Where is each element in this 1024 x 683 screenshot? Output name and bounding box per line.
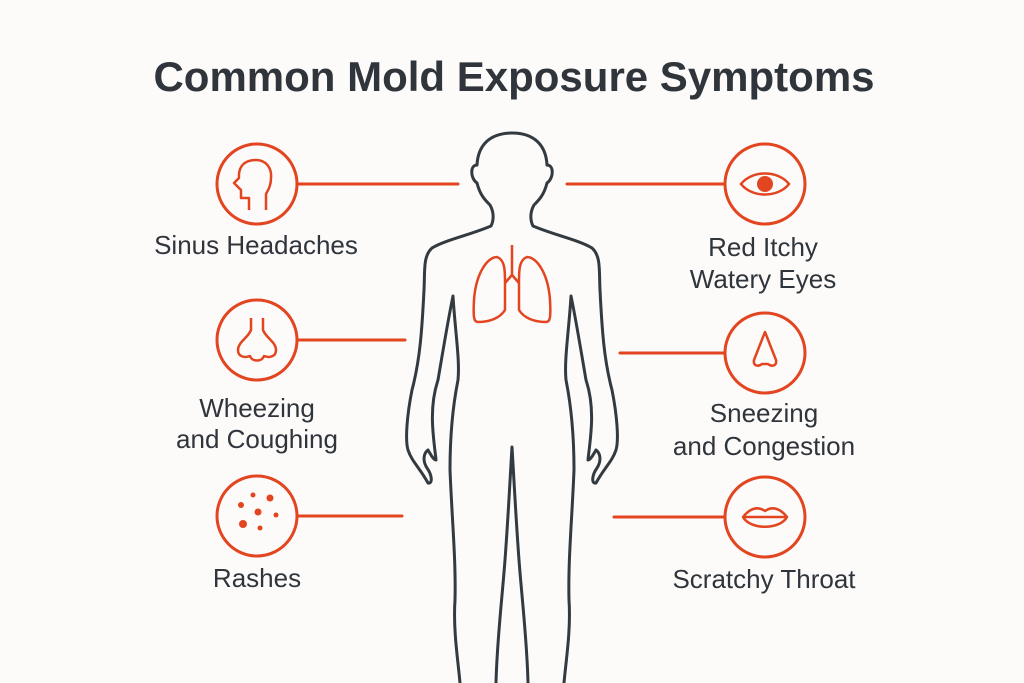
panel: scratchy throat: Scratchy Throat bbox=[672, 564, 856, 594]
panel: sneezing and congestion: and Congestion bbox=[673, 431, 855, 461]
panel: wheezing and coughing: and Coughing bbox=[176, 424, 338, 454]
icon: head bbox=[234, 160, 271, 210]
panel: sneezing and congestion bbox=[673, 313, 855, 461]
icon: dots bbox=[238, 492, 278, 530]
panel: wheezing and coughing: Wheezing bbox=[199, 393, 315, 423]
panel: rashes: Rashes bbox=[213, 563, 301, 593]
body outline bbox=[407, 133, 617, 683]
panel: wheezing and coughing bbox=[176, 300, 338, 454]
panel: scratchy throat bbox=[672, 477, 856, 594]
title: Common Mold Exposure Symptoms bbox=[153, 53, 875, 100]
panel: sinus headaches: Sinus Headaches bbox=[154, 230, 358, 260]
panel: red itchy watery eyes bbox=[690, 144, 836, 294]
panel: red itchy watery eyes: Red Itchy bbox=[708, 232, 818, 262]
icon: nose bbox=[754, 332, 776, 366]
icon: lips bbox=[743, 508, 787, 527]
panel: rashes bbox=[213, 476, 301, 593]
panel: sinus headaches bbox=[154, 144, 358, 260]
panel: sneezing and congestion: Sneezing bbox=[710, 398, 818, 428]
panel: red itchy watery eyes: Watery Eyes bbox=[690, 264, 836, 294]
connector lines bbox=[298, 184, 725, 517]
icon: nose bbox=[238, 318, 276, 360]
icon: eye bbox=[741, 174, 789, 194]
icon: lungs bbox=[474, 245, 550, 322]
